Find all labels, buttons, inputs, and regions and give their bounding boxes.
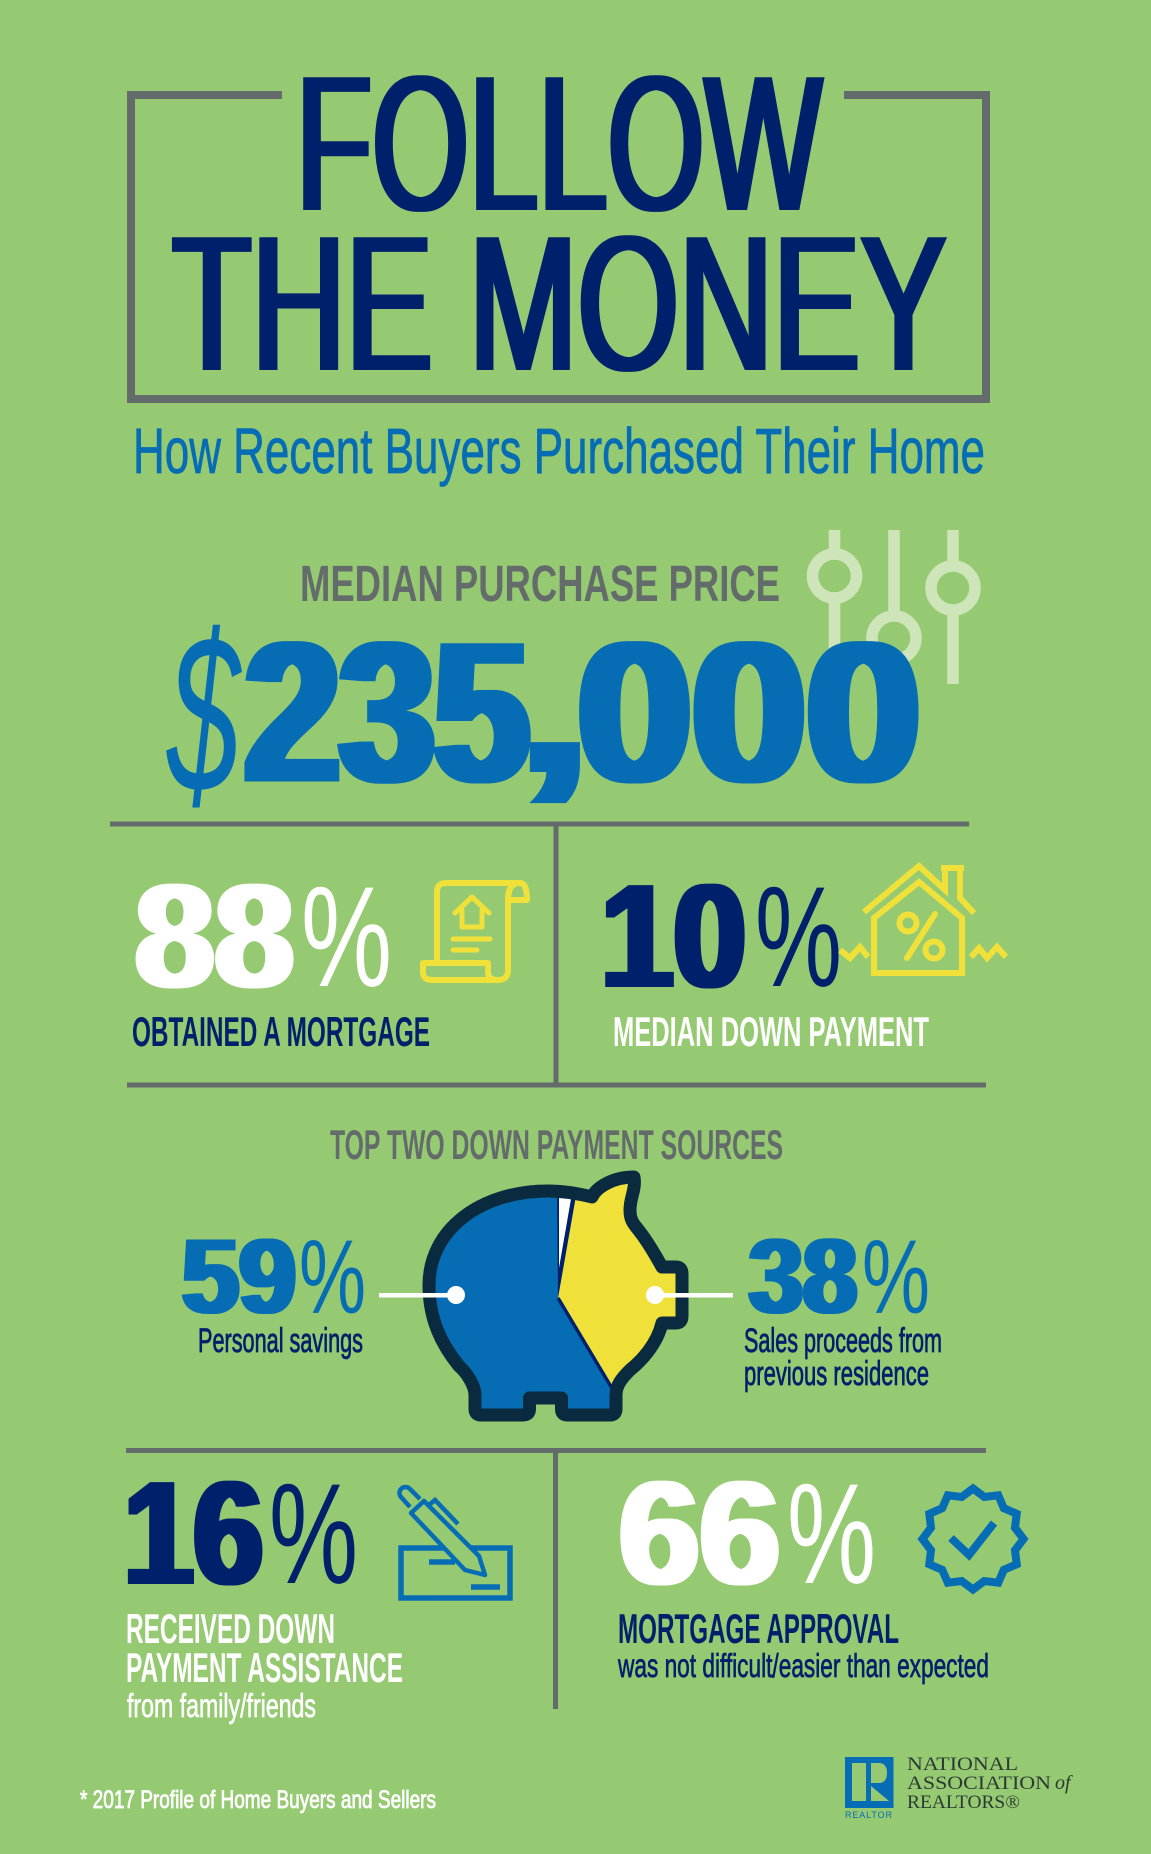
stat: 59% personal savings: % — [299, 1219, 366, 1336]
title: FOLLOW — [296, 35, 822, 251]
logo: association name — [907, 1754, 1073, 1813]
median price figure: 000 — [578, 600, 920, 824]
stat: 88% obtained a mortgage: OBTAINED A MORTGAGE — [132, 1008, 430, 1055]
icon: pen and cheque — [399, 1487, 510, 1598]
dividers: mortgage row — [110, 824, 986, 1085]
median price figure — [166, 587, 921, 840]
stat: 10% median down payment: % — [755, 858, 842, 1017]
footnote: * 2017 Profile of Home Buyers and Sellers — [80, 1786, 436, 1814]
icon: mortgage scroll — [423, 883, 527, 980]
stat: 59% personal savings: 59 — [182, 1216, 296, 1336]
stat: 59% personal savings — [182, 1216, 366, 1360]
median price figure: $ — [166, 587, 242, 840]
icon: approval badge — [922, 1488, 1024, 1590]
logo: association name: of — [1055, 1772, 1073, 1794]
stat: 88% obtained a mortgage — [132, 854, 430, 1055]
median purchase price label: MEDIAN PURCHASE PRICE — [300, 555, 780, 612]
title — [172, 35, 947, 411]
stat: 38% sales proceeds: % — [862, 1219, 930, 1336]
piggy bank chart — [422, 1170, 688, 1422]
stat: 16% received down payment assistance: PAYMENT ASSISTANCE — [126, 1644, 403, 1691]
stat: 16% received down payment assistance: 16 — [124, 1451, 263, 1616]
median price figure: 235 — [245, 600, 529, 824]
title frame — [131, 95, 986, 399]
stat: 59% personal savings: Personal savings — [198, 1322, 363, 1360]
stat: 66% mortgage approval: was not difficult/easier than expected — [617, 1647, 989, 1684]
logo: association name: ASSOCIATION — [907, 1773, 1051, 1794]
stat: 10% median down payment: MEDIAN DOWN PAYMENT — [613, 1008, 929, 1055]
stat: 16% received down payment assistance — [124, 1451, 403, 1724]
stat: 66% mortgage approval: MORTGAGE APPROVAL — [618, 1605, 899, 1652]
stat: 10% median down payment — [601, 854, 929, 1055]
stat: 16% received down payment assistance: % — [269, 1455, 358, 1614]
median price figure: , — [518, 590, 591, 815]
stat: 88% obtained a mortgage: % — [301, 858, 392, 1017]
logo: association name: REALTORS® — [907, 1792, 1020, 1813]
logo: association name: NATIONAL — [907, 1754, 1018, 1775]
stat: 16% received down payment assistance: from family/friends — [127, 1687, 316, 1724]
stat: 66% mortgage approval — [617, 1451, 989, 1684]
logo: realtor block: REALTOR — [845, 1810, 892, 1820]
icon: sliders — [812, 530, 975, 690]
stat: 38% sales proceeds: 38 — [749, 1216, 857, 1336]
stat: 10% median down payment: 10 — [601, 854, 746, 1019]
icon: house with percent — [840, 866, 1006, 973]
stat: 16% received down payment assistance: RECEIVED DOWN — [126, 1605, 335, 1652]
stat: 66% mortgage approval: 66 — [619, 1451, 780, 1616]
stat: 38% sales proceeds — [744, 1216, 942, 1393]
heading: top two down payment sources: TOP TWO DOWN PAYMENT SOURCES — [330, 1121, 783, 1168]
logo: realtor block — [845, 1757, 894, 1820]
pointer: personal savings — [379, 1286, 465, 1304]
pointer: sales proceeds — [646, 1286, 733, 1304]
stat: 88% obtained a mortgage: 88 — [135, 854, 294, 1019]
stat: 38% sales proceeds: previous residence — [744, 1355, 929, 1393]
stat: 38% sales proceeds: Sales proceeds from — [744, 1322, 942, 1360]
dividers: assistance row — [126, 1450, 986, 1709]
stat: 66% mortgage approval: % — [787, 1455, 876, 1614]
